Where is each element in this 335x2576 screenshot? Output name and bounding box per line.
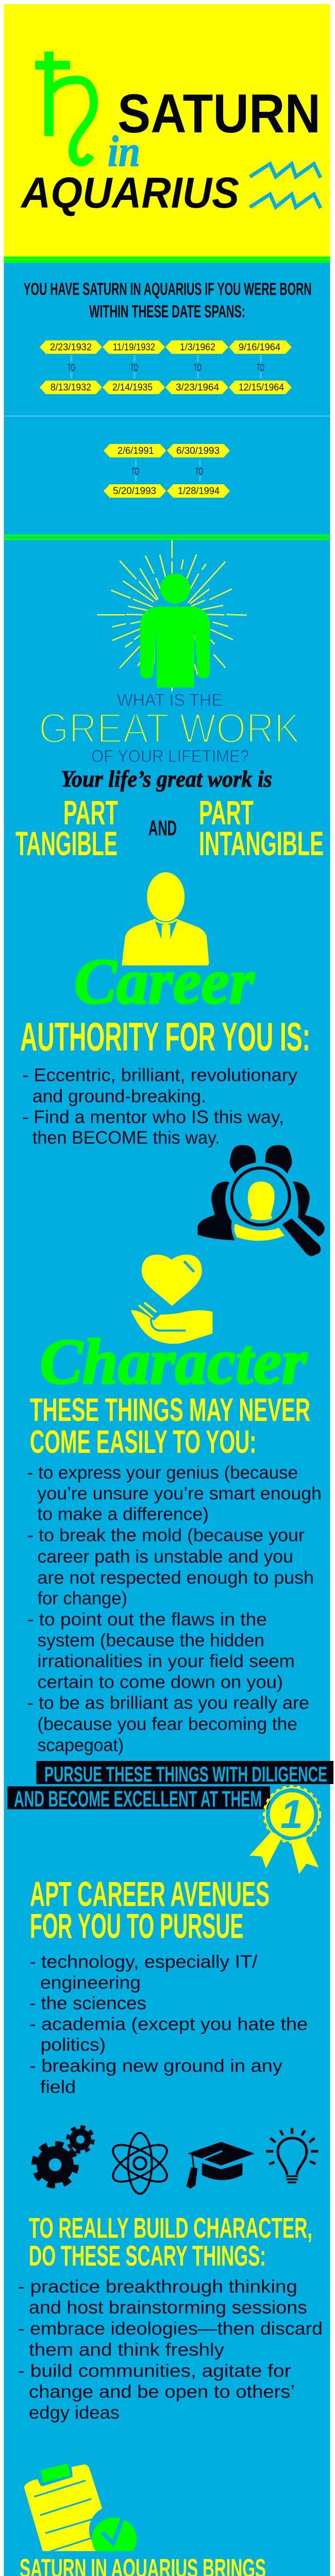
text block: career avenues list: engineering — [40, 1973, 141, 1993]
text block: scary things list: - practice breakthrough thinking — [18, 2277, 297, 2297]
text block: never easy list: - to express your genius (because — [27, 1463, 298, 1483]
text block: career avenues list: - technology, especially IT/ — [29, 1952, 258, 1972]
text block: career avenues list: politics) — [41, 2035, 106, 2055]
top green band — [4, 257, 330, 263]
text block: never easy list: irrationalities in your field seem — [37, 1651, 295, 1671]
heading: great work: WHAT IS THE — [117, 691, 223, 710]
text block: never easy list: career path is unstable and you — [37, 1547, 293, 1567]
heading: character: Character — [40, 1327, 307, 1398]
panel: date spans — [4, 280, 330, 498]
script line: your life's great work: Your life’s great work is — [61, 766, 272, 792]
icon: mentor search — [197, 1145, 325, 1256]
date connector lines — [71, 355, 261, 482]
date labels: 2/23/1932 — [50, 342, 92, 353]
icon: gears — [34, 2127, 93, 2186]
heading: great work — [39, 691, 300, 766]
green divider lines — [4, 534, 330, 540]
TO labels: TO — [195, 466, 203, 478]
heading: date spans — [24, 280, 312, 321]
icon: glowing person — [97, 540, 247, 691]
title: in: in — [108, 127, 140, 176]
text block: authority list: and ground-breaking. — [32, 1086, 206, 1106]
icon: first place ribbon — [249, 1786, 320, 1874]
text block: authority list — [23, 1065, 298, 1148]
text block: never easy list: to make a difference) — [37, 1504, 209, 1524]
heading: date spans: WITHIN THESE DATE SPANS: — [89, 302, 245, 321]
text block: never easy list: are not respected enough to push — [37, 1568, 314, 1588]
part tangible and part intangible: PART — [199, 793, 254, 832]
date labels: 3/23/1964 — [176, 382, 219, 393]
date hexagons — [40, 341, 292, 498]
icon: first place ribbon: 1 — [280, 1791, 303, 1837]
TO labels: TO — [194, 362, 202, 374]
heading: apt career avenues — [30, 1874, 270, 1946]
callout: pursue with diligence — [7, 1761, 333, 1811]
icon: Saturn glyph — [35, 52, 94, 162]
text block: scary things list: edgy ideas — [29, 2402, 120, 2422]
TO labels: TO — [257, 362, 264, 374]
TO labels: TO — [130, 362, 138, 374]
part tangible and part intangible: AND — [148, 816, 177, 840]
panel: title — [4, 4, 330, 257]
text block: career avenues list: field — [40, 2077, 76, 2097]
part tangible and part intangible: TANGIBLE — [15, 824, 118, 862]
text block: career avenues list — [29, 1952, 308, 2097]
text block: never easy list: system (because the hidden — [37, 1631, 264, 1651]
date labels: 1/3/1962 — [180, 342, 215, 353]
icon: light rays — [97, 540, 247, 691]
text block: scary things list: - embrace ideologies—then discard — [18, 2319, 323, 2339]
TO labels: TO — [131, 466, 139, 478]
heading: great work: OF YOUR LIFETIME? — [91, 747, 249, 766]
text block: career avenues list: - the sciences — [29, 1993, 146, 2013]
heading: may never come easily — [30, 1392, 310, 1460]
part tangible and part intangible — [15, 793, 324, 862]
icon: person silhouette — [140, 574, 210, 687]
part tangible and part intangible: PART — [63, 793, 118, 832]
text block: authority list: - Eccentric, brilliant, revolutionary — [23, 1065, 298, 1085]
date labels: 6/30/1993 — [176, 445, 220, 456]
text block: scary things list: them and think freshly — [29, 2340, 225, 2360]
text block: never easy list: - to be as brilliant as you really are — [27, 1693, 309, 1713]
date labels: 8/13/1932 — [51, 382, 91, 393]
text block: career avenues list: - academia (except you hate the — [29, 2014, 308, 2035]
text block: authority list: then BECOME this way. — [32, 1128, 220, 1148]
icon: heart in hand — [131, 1255, 212, 1344]
text block: never easy list: scapegoat) — [37, 1735, 124, 1755]
text block: scary things list — [18, 2277, 323, 2422]
icon: graduation cap — [186, 2142, 255, 2189]
heading: great work: GREAT WORK — [39, 705, 300, 752]
date labels: 12/15/1964 — [239, 382, 284, 393]
heading: build character — [29, 2211, 312, 2272]
icon: light bulb — [266, 2128, 319, 2182]
heading: career: Career — [74, 946, 255, 1018]
date labels: 11/19/1932 — [113, 342, 155, 353]
text block: career avenues list: - breaking new ground in any — [29, 2056, 283, 2076]
text block: never easy list: certain to come down on you) — [37, 1672, 283, 1692]
date labels: 2/6/1991 — [118, 445, 154, 456]
icon: atom — [108, 2133, 172, 2194]
date labels: 5/20/1993 — [113, 485, 156, 497]
title: Aquarius: AQUARIUS — [20, 168, 239, 217]
date labels: 1/28/1994 — [178, 485, 220, 497]
date labels: 9/16/1964 — [239, 342, 280, 353]
text block: never easy list: for change) — [37, 1588, 127, 1608]
text block: never easy list: - to point out the flaws in the — [27, 1609, 267, 1630]
icon: Aquarius glyph — [250, 164, 321, 208]
text block: never easy list: (because you fear becoming the — [37, 1714, 297, 1734]
date labels — [50, 342, 284, 497]
icon: businessman — [122, 872, 209, 965]
date labels: 2/14/1935 — [112, 382, 153, 393]
icon: clipboard with check — [24, 2464, 140, 2554]
text block: never easy list — [27, 1463, 322, 1755]
TO labels: TO — [68, 362, 75, 374]
text block: authority list: - Find a mentor who IS this way, — [23, 1107, 284, 1127]
text block: never easy list: you’re unsure you’re smart enough — [37, 1484, 322, 1504]
text block: scary things list: and host brainstorming sessions — [29, 2298, 307, 2318]
text block: scary things list: - build communities, agitate for — [18, 2361, 291, 2381]
TO labels — [68, 362, 264, 478]
text block: scary things list: change and be open to others’ — [29, 2382, 295, 2402]
text block: never easy list: - to break the mold (because your — [27, 1526, 305, 1546]
